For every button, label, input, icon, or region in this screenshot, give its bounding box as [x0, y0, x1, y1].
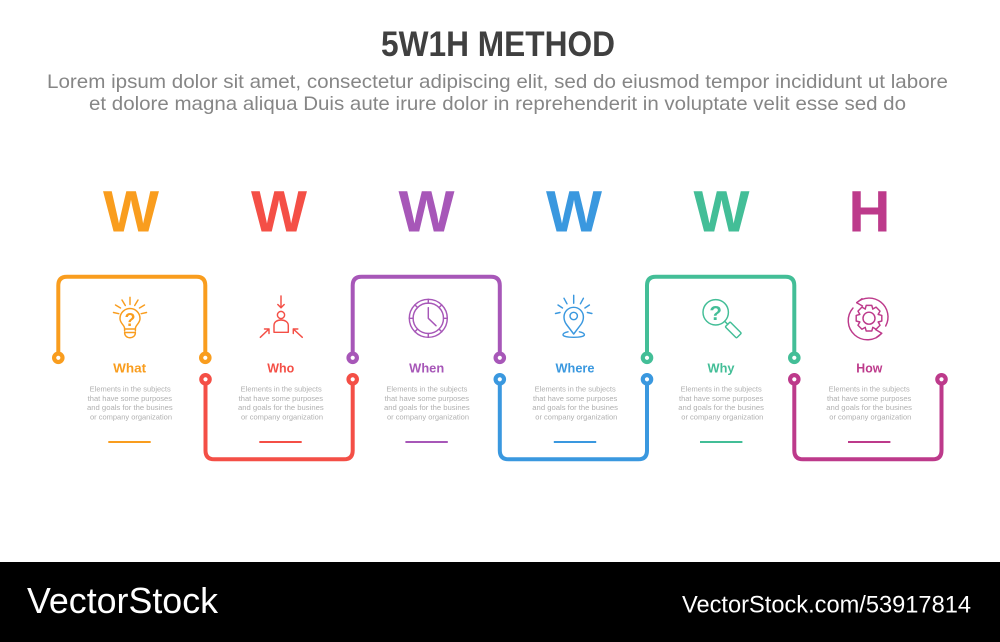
column letters W W W W W H: W	[546, 180, 602, 245]
panel: when	[348, 277, 504, 443]
title: 5W1H METHOD	[381, 25, 615, 64]
description: when: or company organization	[387, 412, 469, 422]
description: what: that have some purposes	[88, 394, 172, 403]
column letters W W W W W H: W	[694, 180, 750, 245]
description: what: and goals for the busines	[87, 403, 173, 412]
description: how: or company organization	[829, 412, 911, 422]
description: what: Elements in the subjects	[90, 384, 171, 393]
description: who: and goals for the busines	[238, 403, 324, 412]
label: how: How	[856, 362, 883, 376]
description: why: or company organization	[681, 412, 763, 422]
underline: why	[700, 441, 742, 443]
column letters W W W W W H: H	[849, 180, 890, 245]
description: how	[826, 384, 912, 422]
underline: who	[259, 441, 302, 443]
description: when: that have some purposes	[385, 394, 469, 403]
description: why: Elements in the subjects	[681, 384, 762, 393]
blue connector line	[496, 375, 651, 459]
description: how: Elements in the subjects	[829, 384, 910, 393]
description: who: or company organization	[241, 412, 323, 422]
description: where: that have some purposes	[533, 394, 618, 403]
icon: light bulb with question mark: ?	[124, 310, 136, 330]
icon: light bulb with question mark	[114, 297, 146, 338]
icon: location pin	[556, 295, 592, 337]
green connector line	[643, 277, 798, 362]
panel: who	[201, 296, 357, 459]
description: who: Elements in the subjects	[241, 384, 322, 393]
description: why: and goals for the busines	[678, 403, 764, 412]
label: what: What	[113, 362, 147, 376]
column letters W W W W W H	[103, 180, 890, 245]
footer image reference: VectorStock.com/53917814	[682, 592, 971, 618]
column letters W W W W W H: W	[103, 180, 159, 245]
label: why: Why	[708, 362, 735, 376]
icon: person with arrows	[260, 296, 302, 337]
panel: where	[496, 295, 651, 459]
underline: what	[108, 441, 151, 443]
magenta connector line	[790, 375, 946, 459]
description: what	[87, 384, 173, 422]
icon: magnifier with question mark: ?	[709, 302, 722, 325]
column letters W W W W W H: W	[251, 180, 307, 245]
description: when: Elements in the subjects	[386, 384, 468, 393]
footer bar	[0, 562, 1000, 642]
description: when	[384, 384, 470, 422]
underline: how	[848, 441, 890, 443]
icon: clock	[409, 299, 447, 337]
subtitle text block: Lorem ipsum dolor sit amet, consectetur adipiscing elit, sed do eiusmod tempor incididunt ut labore	[47, 71, 948, 93]
subtitle text block: et dolore magna aliqua Duis aute irure dolor in reprehenderit in voluptate velit esse sed do	[89, 93, 906, 115]
description: where: Elements in the subjects	[535, 384, 616, 393]
label: who: Who	[267, 362, 295, 376]
purple connector line	[348, 277, 504, 362]
label: when: When	[409, 362, 444, 376]
panel: how	[790, 298, 946, 459]
icon: gear with circular arrows	[848, 298, 888, 340]
footer brand: VectorStock	[27, 580, 219, 621]
column letters W W W W W H: W	[398, 180, 455, 245]
orange connector line	[54, 277, 209, 362]
description: why	[678, 384, 764, 422]
description: what: or company organization	[90, 412, 172, 422]
description: when: and goals for the busines	[384, 403, 470, 412]
label: where: Where	[556, 362, 595, 376]
description: where	[532, 384, 618, 422]
underline: where	[554, 441, 596, 443]
description: where: and goals for the busines	[532, 403, 618, 412]
red connector line	[201, 375, 357, 459]
description: who: that have some purposes	[239, 394, 323, 403]
description: why: that have some purposes	[679, 394, 764, 403]
description: where: or company organization	[535, 412, 617, 422]
description: how: that have some purposes	[827, 394, 912, 403]
subtitle text block	[47, 71, 948, 115]
description: how: and goals for the busines	[826, 403, 912, 412]
panel: what	[54, 277, 209, 443]
panel: why	[643, 277, 798, 443]
underline: when	[405, 441, 448, 443]
description: who	[238, 384, 324, 422]
icon: magnifier with question mark	[703, 300, 741, 338]
